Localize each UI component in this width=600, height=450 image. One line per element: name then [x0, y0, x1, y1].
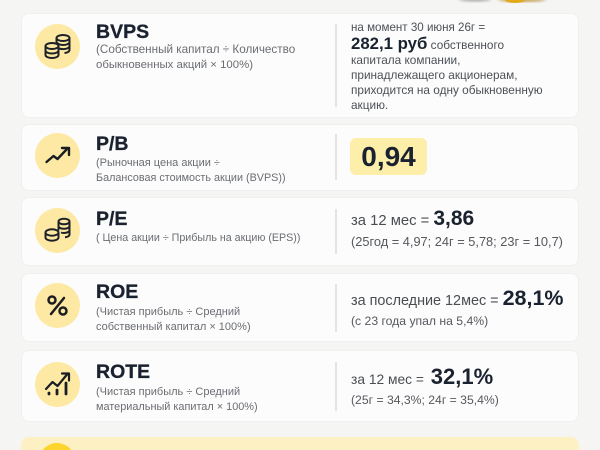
note: P/E history: (25год = 4,97; 24г = 5,78; 23г = 10,7) [351, 234, 563, 249]
formula: ROE [96, 306, 251, 333]
top photo remnant: coins [458, 0, 548, 3]
icon: coins [35, 208, 80, 253]
formula: ROE: собственный капитал × 100%) [96, 321, 251, 333]
heading: BVPS: BVPS [96, 21, 149, 43]
formula: ROTE: материальный капитал × 100%) [96, 401, 258, 413]
divider [335, 209, 336, 254]
value text: BVPS amount: 282,1 руб собственного [351, 34, 504, 53]
divider [335, 134, 336, 180]
value text: BVPS description: принадлежащего акционерам, [351, 68, 518, 82]
formula: P/E: ( Цена акции ÷ Прибыль на акцию (EPS)) [96, 232, 300, 244]
icon: yellow circle [42, 443, 72, 450]
value: P/E: за 12 мес = 3,86 [351, 207, 474, 230]
formula: BVPS: обыкновенных акций × 100%) [96, 59, 253, 71]
formula: P/B: Балансовая стоимость акции (BVPS)) [96, 172, 286, 184]
heading: ROTE: ROTE [96, 361, 150, 383]
divider [335, 24, 336, 107]
divider [335, 362, 336, 411]
formula: P/B: (Рыночная цена акции ÷ [96, 157, 220, 169]
value text: BVPS description: акцию. [351, 98, 388, 112]
value badge: P/B [350, 138, 427, 175]
formula: ROTE [96, 386, 258, 413]
panel: yellow summary card [21, 437, 579, 450]
value text: BVPS description [351, 53, 543, 112]
divider [335, 284, 336, 332]
formula: ROTE: (Чистая прибыль ÷ Средний [96, 386, 240, 398]
panel: ROTE [21, 350, 579, 422]
value text: BVPS description: приходится на одну обыкновенную [351, 83, 543, 97]
panel: P/B [21, 124, 579, 191]
heading: P/B: P/B [96, 133, 129, 155]
panel: P/E [21, 197, 579, 266]
icon: rising arrow [35, 133, 80, 178]
formula: BVPS: (Собственный капитал ÷ Количество [96, 43, 295, 56]
formula: ROE: (Чистая прибыль ÷ Средний [96, 306, 240, 318]
value text: BVPS description: капитала компании, [351, 53, 460, 67]
value text: BVPS: на момент 30 июня 26г = [351, 21, 485, 34]
value badge: P/B: 0,94 [361, 141, 416, 172]
heading: ROE: ROE [96, 281, 138, 303]
formula: BVPS [96, 43, 295, 71]
icon: percent [35, 283, 80, 328]
icon: growth bars [35, 362, 80, 407]
panel: ROE [21, 273, 579, 342]
note: ROE change: (с 23 года упал на 5,4%) [351, 314, 488, 328]
formula: P/B [96, 157, 286, 184]
icon: coin stacks [35, 24, 80, 69]
value: ROE: за последние 12мес = 28,1% [351, 286, 564, 310]
value: ROTE: за 12 мес = 32,1% [351, 364, 493, 389]
note: ROTE history: (25г = 34,3%; 24г = 35,4%) [351, 393, 499, 407]
panel: BVPS [21, 13, 579, 118]
heading: P/E: P/E [96, 208, 127, 230]
